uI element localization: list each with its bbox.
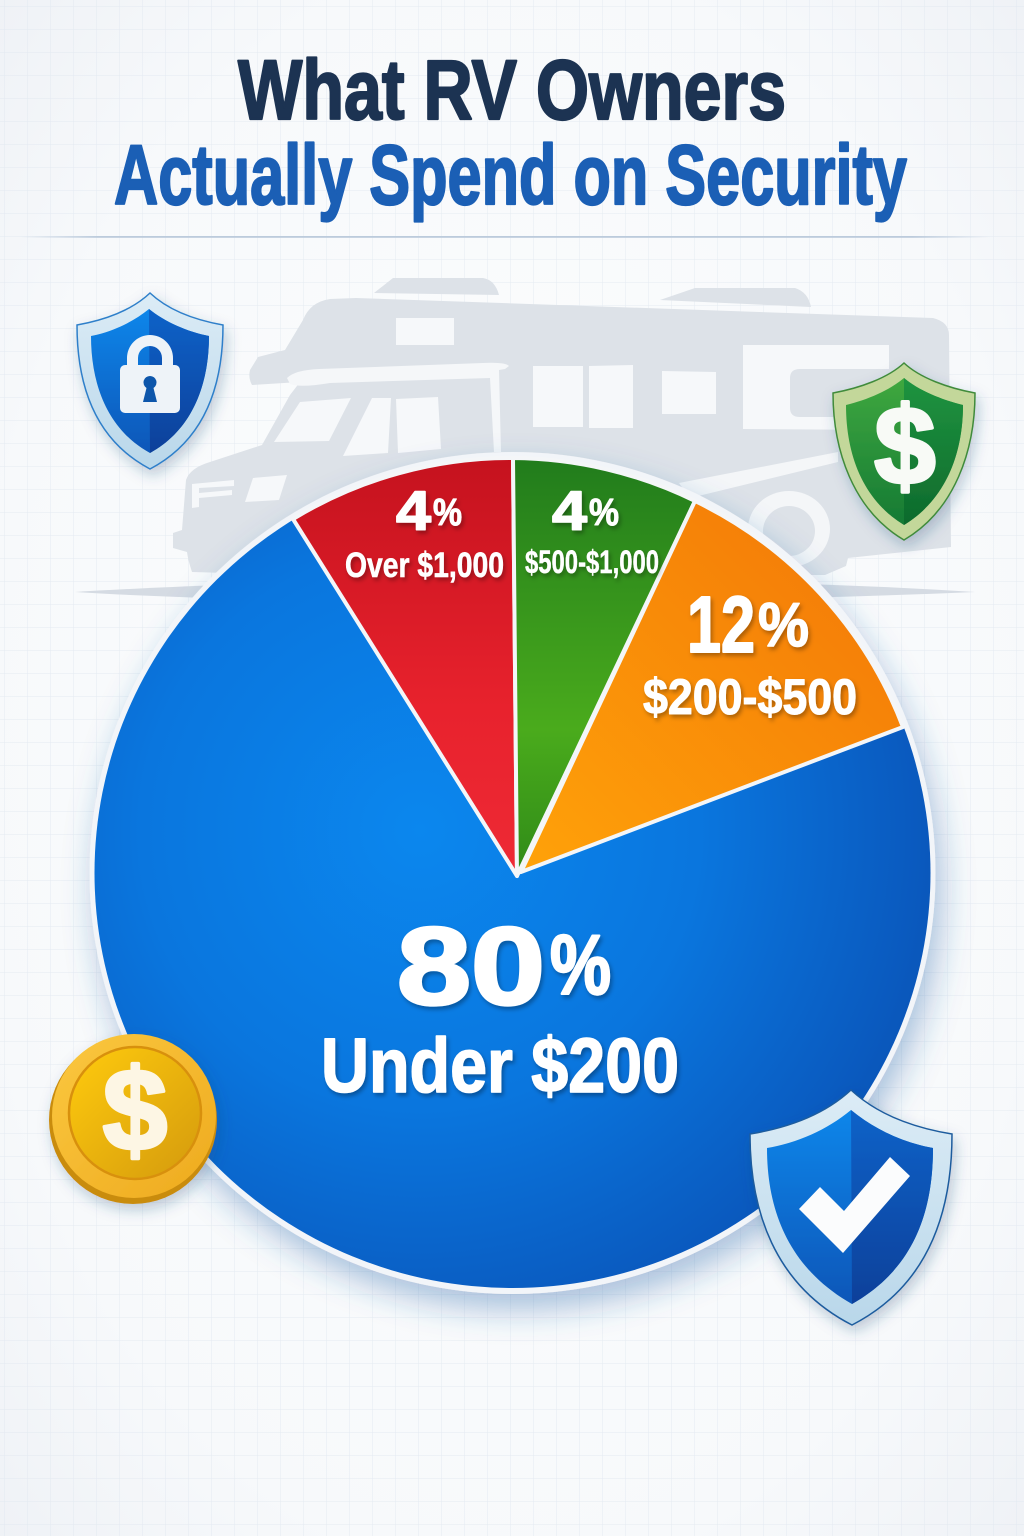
RV body <box>173 298 951 575</box>
slice: 12% $200-$500 <box>521 501 903 872</box>
label: 80% under $200 <box>321 905 679 1109</box>
label: 4% $500-$1,000: 4 <box>552 479 587 542</box>
overcab highlight <box>287 363 509 452</box>
RV silhouette <box>75 278 975 602</box>
label: 4% over $1,000: Over $1,000 <box>345 546 504 585</box>
slice: 4% $500-$1,000 <box>513 458 695 876</box>
rear compartment <box>743 345 890 430</box>
label: 4% over $1,000: % <box>433 492 462 534</box>
icon: check shield <box>750 1090 952 1325</box>
cab windows <box>274 397 441 456</box>
roof vents <box>374 278 811 307</box>
label: 4% $500-$1,000 <box>525 479 659 580</box>
slice: 80% under $200 <box>94 458 930 1288</box>
pie chart <box>90 452 936 1294</box>
label: 12% $200-$500: $200-$500 <box>643 669 857 725</box>
slice: 4% over $1,000 <box>293 458 517 876</box>
label: 12% $200-$500 <box>643 580 857 725</box>
label: 4% over $1,000 <box>345 479 504 585</box>
label: 12% $200-$500: % <box>758 591 809 660</box>
dollar sign: $ <box>874 385 936 508</box>
label: 4% $500-$1,000: % <box>589 492 619 534</box>
label: 12% $200-$500: 12 <box>687 580 755 669</box>
title <box>114 43 907 222</box>
side windows <box>533 365 716 428</box>
label: 80% under $200: 80 <box>397 905 545 1028</box>
headlight and grille <box>192 475 287 508</box>
title line 1: What RV Owners <box>238 43 786 137</box>
padlock <box>120 335 180 413</box>
pie outer ring <box>90 452 936 1294</box>
check mark <box>799 1157 910 1253</box>
label: 80% under $200: % <box>550 918 611 1012</box>
label: 4% $500-$1,000: $500-$1,000 <box>525 544 659 580</box>
label: 4% over $1,000: 4 <box>396 479 431 542</box>
label: 80% under $200: Under $200 <box>321 1023 679 1109</box>
side stripe <box>679 452 838 498</box>
icon: lock shield <box>77 293 223 469</box>
upper window <box>396 318 454 345</box>
dollar sign: $ <box>103 1045 167 1175</box>
ground shadow <box>75 580 975 602</box>
icon: gold coin <box>49 1034 217 1204</box>
wheel <box>748 491 830 567</box>
icon: green dollar shield <box>833 363 975 540</box>
